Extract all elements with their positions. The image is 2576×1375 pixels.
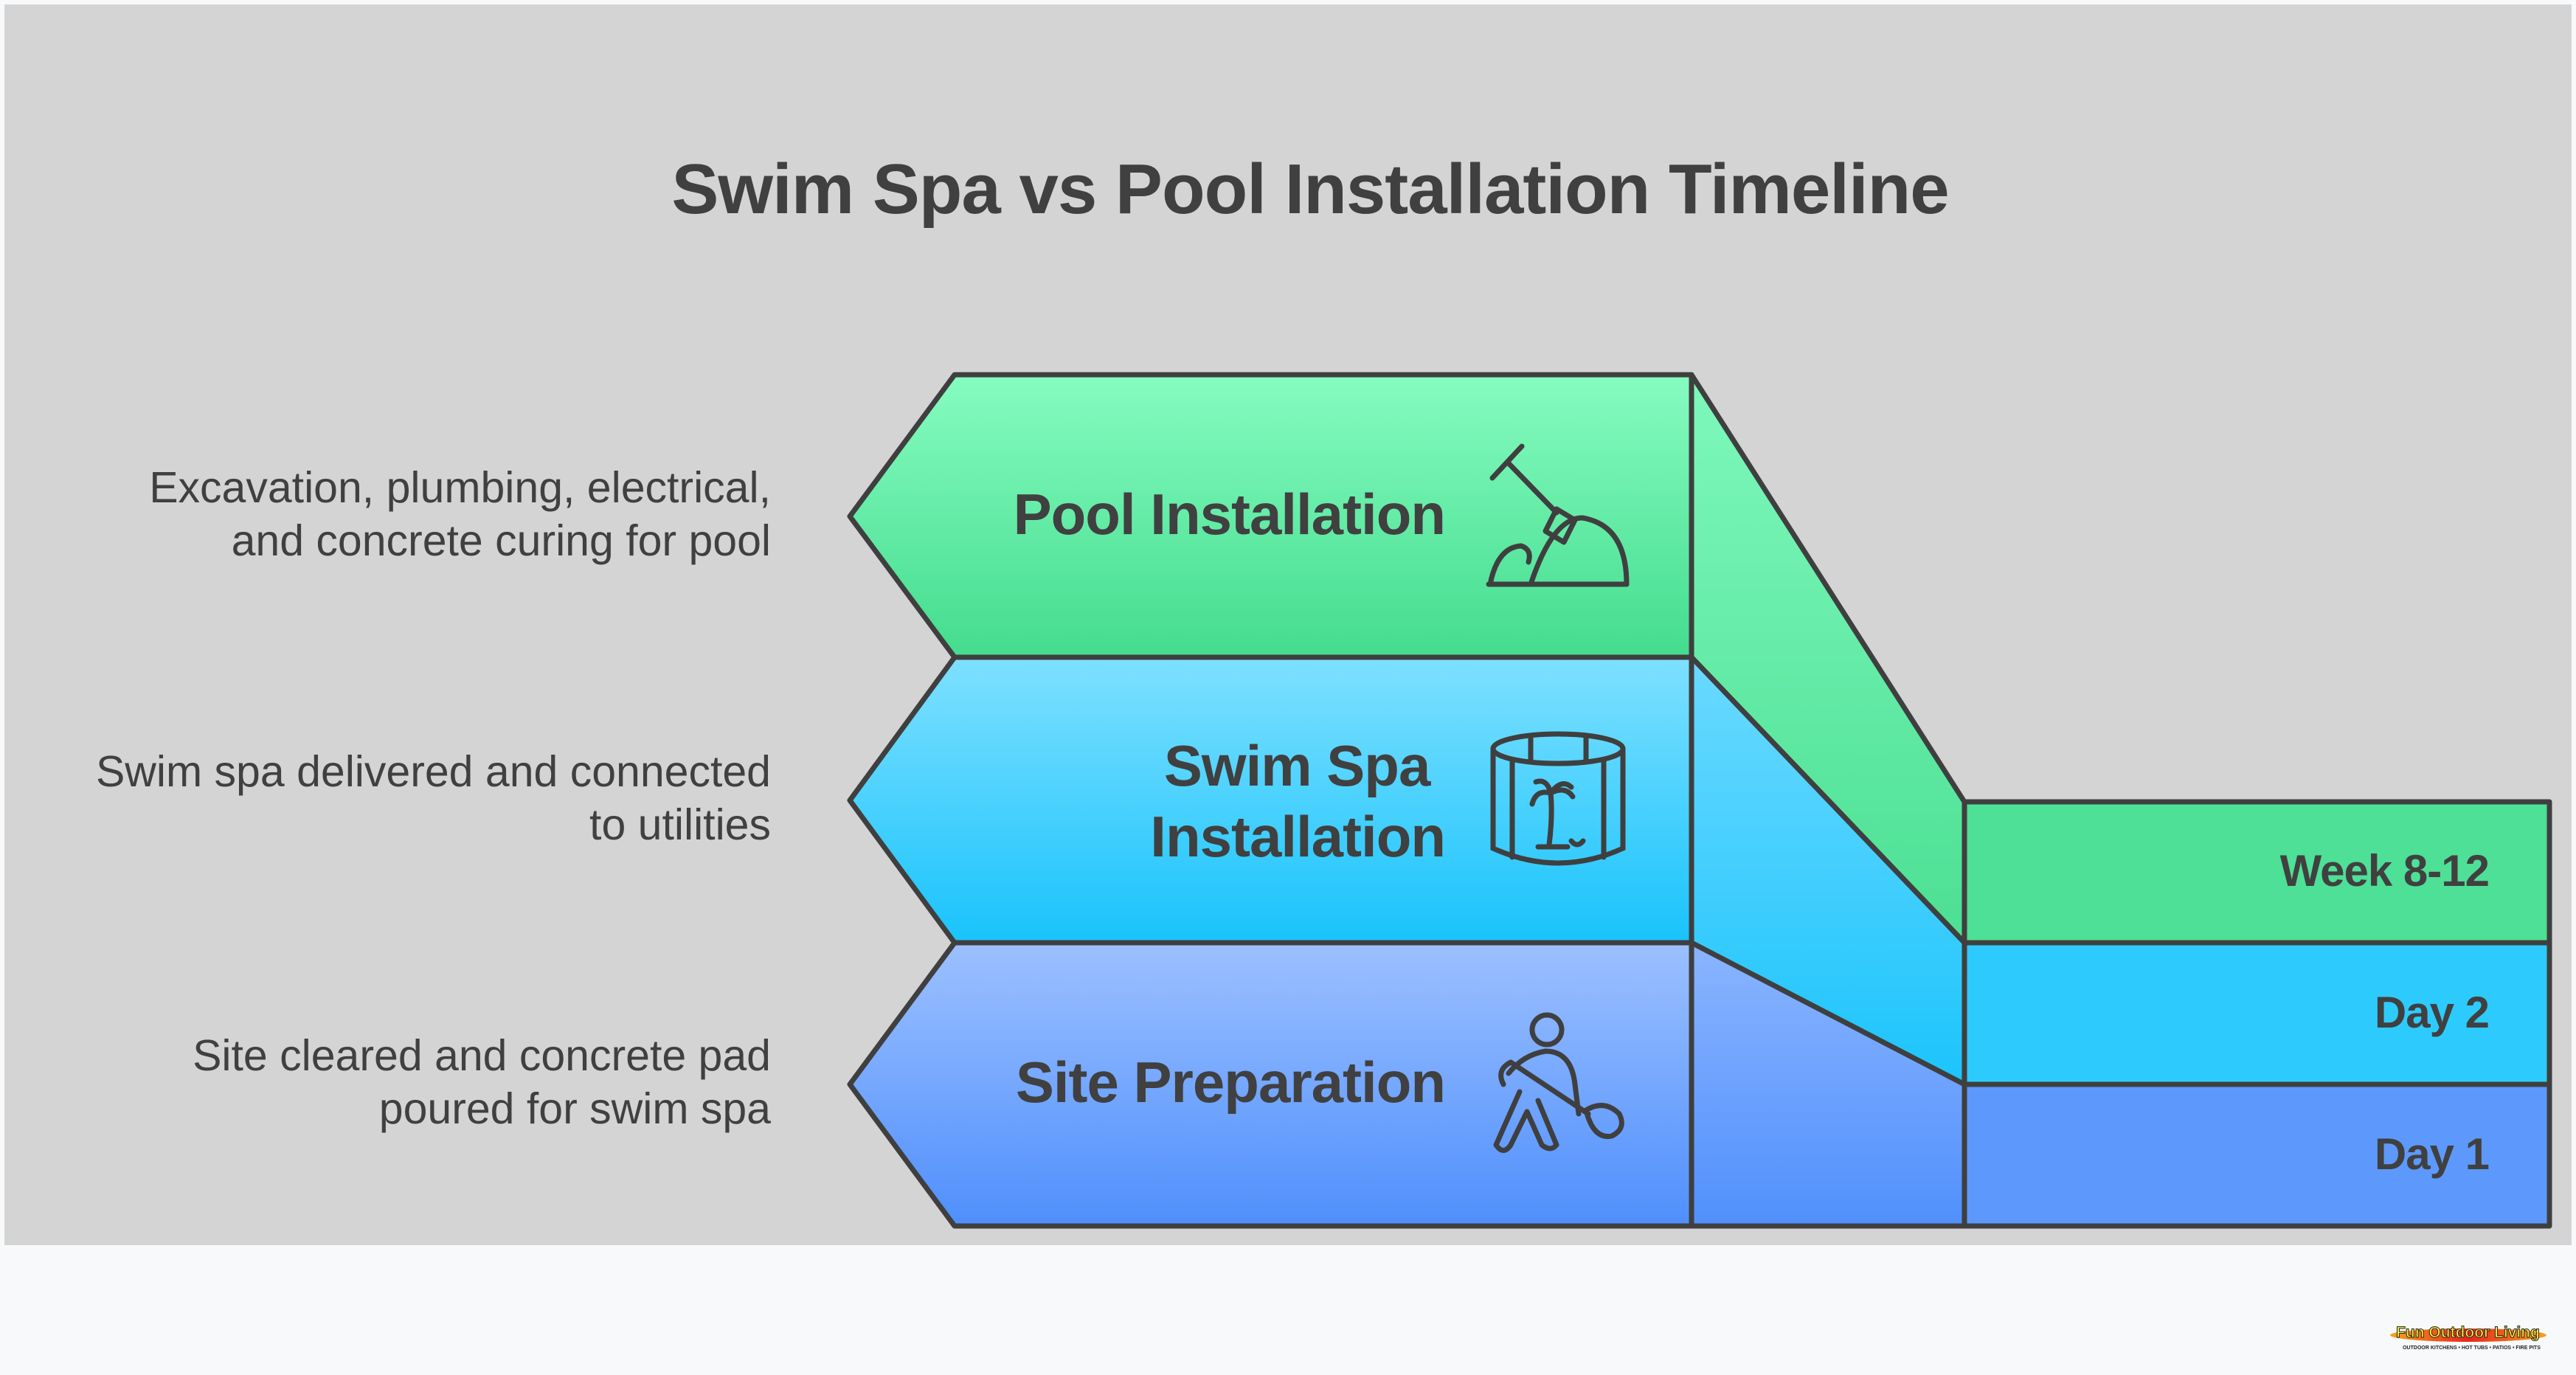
description: site prep [193,1031,771,1133]
logo [2390,1324,2546,1351]
description: site prep: poured for swim spa [379,1084,771,1133]
label: swim spa installation: Installation [1150,804,1445,869]
box: day 1 [1964,1084,2549,1226]
description: pool: Excavation, plumbing, electrical, [149,463,771,512]
label: site preparation: Site Preparation [1016,1050,1445,1115]
box: day 2 [1964,943,2549,1084]
panel: pool installation [850,375,1964,943]
label: swim spa installation [1150,733,1445,869]
description: pool: and concrete curing for pool [232,516,771,565]
panel: site preparation [850,943,1964,1226]
label: day 1: Day 1 [2375,1129,2489,1179]
label: week 8-12: Week 8-12 [2280,846,2489,896]
box: week 8-12 [1964,802,2549,943]
logo: Fun Outdoor Living [2396,1324,2540,1341]
label: pool installation: Pool Installation [1014,482,1445,547]
description: site prep: Site cleared and concrete pad [193,1031,771,1080]
label: day 2: Day 2 [2375,988,2489,1037]
description: swim spa: Swim spa delivered and connected [96,747,771,796]
icon: swim spa tub [1493,734,1623,863]
description: swim spa [96,747,771,849]
title: Swim Spa vs Pool Installation Timeline [671,150,1949,229]
description: pool [149,463,771,565]
logo: OUTDOOR KITCHENS • HOT TUBS • PATIOS • FIRE PITS [2403,1345,2541,1351]
description: swim spa: to utilities [589,800,771,849]
icon: worker with shovel [1496,1015,1621,1151]
label: swim spa installation: Swim Spa [1164,733,1430,798]
panel: swim spa installation [850,657,1964,1084]
icon: shovel and dirt [1489,446,1627,584]
